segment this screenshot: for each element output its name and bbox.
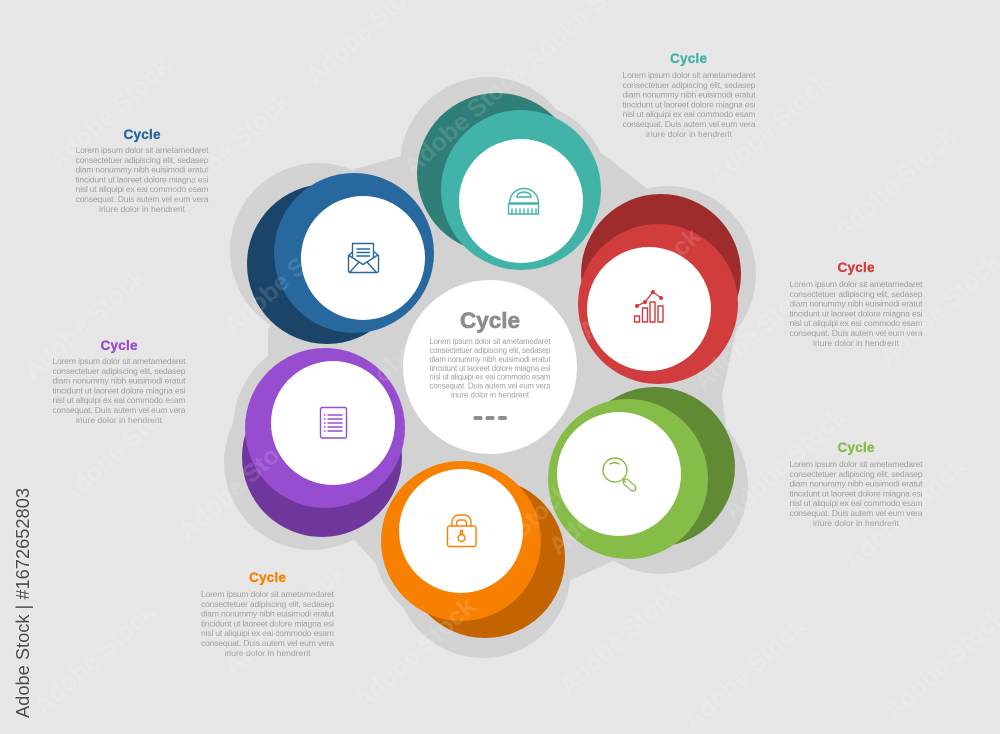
text block: red: diam nonummy nibh euisimodi eratut [790,299,923,309]
text block: blue: Lorem ipsum dolor sit ametamedaret [76,145,209,155]
text block: red: tincidunt ut laoreet dolore miagna esi [790,308,923,318]
text block: red: consequat. Duis autem vel eum vera [790,328,923,338]
text block: purple: Lorem ipsum dolor sit ametamedaret [52,356,186,366]
watermark pattern: Adobe Stock [219,217,351,341]
text block: green: Cycle [838,440,875,455]
text block: purple: diam nonummy nibh euisimodi eratut [52,376,186,386]
watermark pattern: Adobe Stock [704,67,836,191]
watermark pattern: Adobe Stock [29,597,161,721]
text block: blue: consequat. Duis autem vel eum vera [76,194,209,204]
text block: purple: tincidunt ut laoreet dolore miagna esi [52,385,186,395]
text block: teal: consectetuer adipiscing elit, sedasep [622,80,756,90]
icon: rising bar chart [634,291,663,322]
watermark pattern: Adobe Stock [554,577,686,701]
icon: protractor and ruler [508,188,538,214]
text block: green: iriure dolor in hendrerit [813,518,900,528]
text block: blue: iriure dolor in hendrerit [99,204,186,214]
text block: teal: nisl ut aliquipi ex eai commodo esam [622,109,756,119]
text block: blue [76,127,209,214]
watermark pattern: Adobe Stock [44,52,176,176]
watermark pattern: Adobe Stock [164,87,296,211]
text block: orange: nisl ut aliquipi ex eai commodo esam [201,628,334,638]
center body text: nisl ut aliquipi ex eai commodo esam [430,373,550,382]
text block: teal: Lorem ipsum dolor sit ametamedaret [622,70,756,80]
text block: orange: consequat. Duis autem vel eum vera [201,638,334,648]
watermark pattern: Adobe Stock [19,262,151,386]
icon: open envelope with letter [348,244,378,272]
text block: orange: iriure dolor in hendrerit [225,648,311,658]
text block: purple: Cycle [100,338,138,353]
text block: red: Lorem ipsum dolor sit ametamedaret [790,279,923,289]
watermark pattern: Adobe Stock [219,557,351,681]
text block: green: diam nonummy nibh euisimodi eratut [790,479,923,489]
text block: green [790,440,923,528]
text block: blue: Cycle [124,127,161,142]
text block: green: Lorem ipsum dolor sit ametamedaret [790,459,923,469]
icon: magnifying glass [603,458,637,492]
watermark pattern: Adobe Stock [829,122,961,246]
text block: orange [201,570,335,658]
text block: teal: iriure dolor in hendrerit [646,129,733,139]
text block: teal [622,51,756,139]
text block: teal: tincidunt ut laoreet dolore miagna esi [622,99,756,109]
panel: central summary circle [403,280,577,454]
panel: green step circle [548,387,735,559]
text block: blue: consectetuer adipiscing elit, sedasep [76,155,209,165]
text block: green: nisl ut aliquipi ex eai commodo esam [790,498,922,508]
text block: orange: tincidunt ut laoreet dolore miagna esi [201,618,334,628]
text block: red: Cycle [838,260,875,275]
stock id label: Adobe Stock | #1672652803 [12,488,33,718]
text block: teal: diam nonummy nibh euisimodi eratut [622,90,756,100]
watermark pattern: Adobe Stock [719,402,851,526]
watermark pattern: Adobe Stock [574,222,706,346]
text block: green: tincidunt ut laoreet dolore miagna esi [790,488,923,498]
text block: blue: diam nonummy nibh euisimodi eratut [76,165,209,175]
text block: teal: consequat. Duis autem vel eum vera [622,119,756,129]
text block: purple: consequat. Duis autem vel eum vera [52,405,186,415]
watermark pattern: Adobe Stock [349,592,481,716]
watermark pattern: Adobe Stock [689,272,821,396]
watermark pattern: Adobe Stock [54,387,186,511]
center body text: consectetuer adipiscing elit, sedasep [430,346,551,355]
panel: purple step circle [242,348,405,537]
text block: red: nisl ut aliquipi ex eai commodo esam [790,318,922,328]
text block: green: consequat. Duis autem vel eum vera [790,508,923,518]
text block: orange: diam nonummy nibh euisimodi eratut [201,609,335,619]
panel: teal step circle [417,93,601,270]
icon: document list [320,408,346,438]
watermark pattern: Adobe Stock [344,287,476,411]
center body text: Lorem ipsum dolor sit ametamedaret [430,337,551,346]
panel: red step circle [578,194,741,384]
panel: blue step circle [247,173,434,344]
text block: purple: iriure dolor in hendrerit [76,415,163,425]
center body text: diam nonummy nibh euisimodi eratut [430,355,551,364]
text block: orange: Lorem ipsum dolor sit ametamedaret [201,589,335,599]
center three dashes [474,416,507,420]
center heading: Cycle [460,308,520,333]
watermark pattern: Adobe Stock [174,422,306,546]
text block: red: iriure dolor in hendrerit [813,338,900,348]
text block: blue: tincidunt ut laoreet dolore miagna esi [76,174,209,184]
watermark pattern: Adobe Stock [839,452,971,576]
text block: red [790,260,923,348]
center body text: iriure dolor in hendrerit [451,390,530,400]
center body text: tincidunt ut laoreet dolore miagna esi [430,364,551,373]
text block: green: consectetuer adipiscing elit, sedasep [790,469,923,479]
gray blob backdrop [224,77,756,658]
panel: orange step circle [381,461,565,638]
text block: red: consectetuer adipiscing elit, sedasep [790,289,923,299]
watermark pattern: Adobe Stock [444,477,576,601]
watermark pattern: Adobe Stock [679,612,811,734]
text block: purple [52,338,186,425]
watermark pattern: Adobe Stock [544,437,676,561]
text block: purple: consectetuer adipiscing elit, sedasep [52,366,186,376]
text block: orange: Cycle [249,570,286,585]
text block: blue: nisl ut aliquipi ex eai commodo esam [76,184,208,194]
center body text: consequat. Duis autem vel eum vera [430,382,551,391]
text block: orange: consectetuer adipiscing elit, sedasep [201,599,334,609]
watermark pattern: Adobe Stock [399,57,531,181]
icon: padlock [448,515,476,546]
text block: purple: nisl ut aliquipi ex eai commodo esam [52,395,186,405]
text block: teal: Cycle [670,51,707,66]
